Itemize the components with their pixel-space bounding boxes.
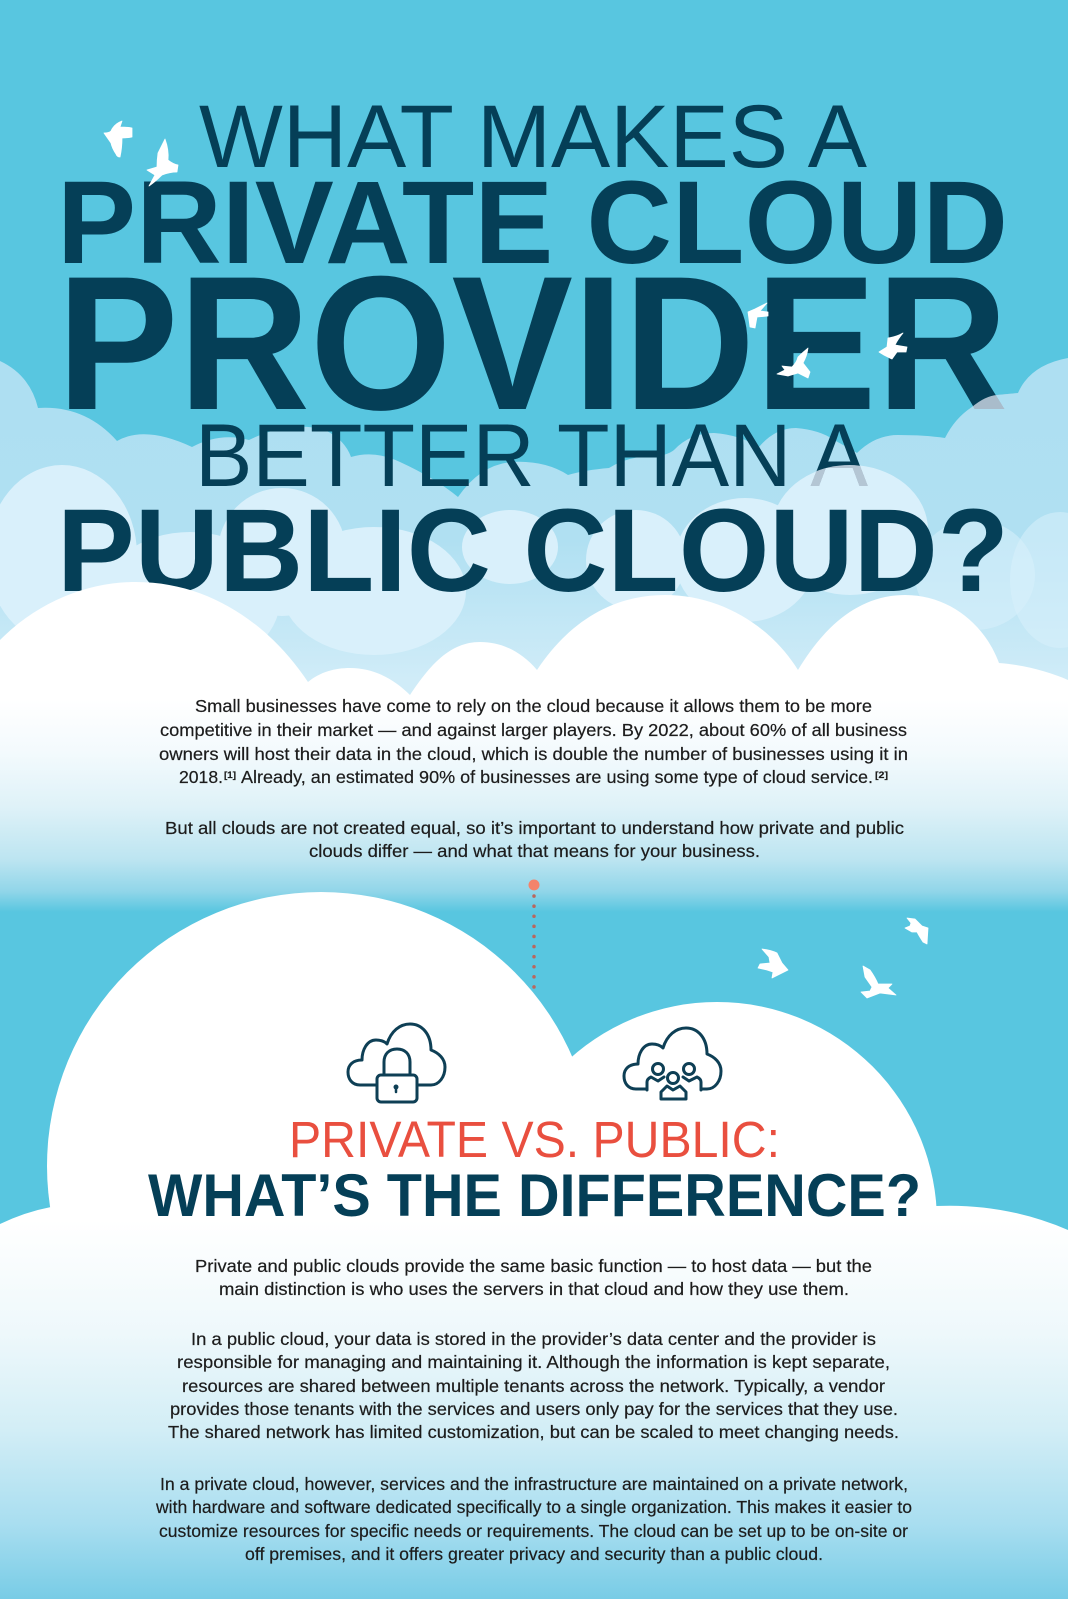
section heading <box>148 1111 921 1229</box>
difference body text: responsible for managing and maintaining it. Although the information is kept separate, <box>177 1352 890 1372</box>
lower big cloud <box>0 892 1068 1599</box>
main title: PROVIDER <box>57 237 1008 450</box>
birds over PROVIDER <box>748 303 907 378</box>
difference body text: with hardware and software dedicated specifically to a single organization. This makes it easier to <box>155 1497 912 1517</box>
icon: private cloud with lock <box>348 1024 445 1102</box>
intro text: competitive in their market — and against larger players. By 2022, about 60% of all business <box>160 720 907 740</box>
intro text <box>159 696 908 861</box>
intro text: Small businesses have come to rely on the cloud because it allows them to be more <box>195 696 872 716</box>
dotted connector <box>528 880 540 1000</box>
difference body text: In a private cloud, however, services and the infrastructure are maintained on a private network, <box>160 1474 908 1494</box>
section heading: WHAT’S THE DIFFERENCE? <box>148 1162 921 1229</box>
difference body text: resources are shared between multiple tenants across the network. Typically, a vendor <box>182 1376 885 1396</box>
back cloud layer <box>0 358 1068 720</box>
section heading: PRIVATE VS. PUBLIC: <box>289 1111 780 1168</box>
difference body text: provides those tenants with the services and users only pay for the services that they use. <box>170 1399 898 1419</box>
difference body text: The shared network has limited customization, but can be scaled to meet changing needs. <box>168 1422 899 1442</box>
front white cloud with intro text background <box>0 582 1068 912</box>
main title <box>57 86 1009 617</box>
difference body text: In a public cloud, your data is stored in the provider’s data center and the provider is <box>191 1329 876 1349</box>
intro text: 2018. <box>179 767 223 787</box>
cloud overlap on title letter A <box>810 465 882 490</box>
intro text: clouds differ — and what that means for your business. <box>309 841 760 861</box>
difference body text: Private and public clouds provide the same basic function — to host data — but the <box>195 1256 872 1276</box>
difference body text <box>155 1256 912 1564</box>
main title: PRIVATE CLOUD <box>57 157 1008 289</box>
middle cloud layer <box>0 465 1068 668</box>
intro text: Already, an estimated 90% of businesses are using some type of cloud service. <box>241 767 873 787</box>
main title: WHAT MAKES A <box>199 86 868 186</box>
intro text: [1] <box>224 770 236 780</box>
birds right of connector <box>758 918 928 998</box>
main title: PUBLIC CLOUD? <box>57 485 1009 617</box>
intro text: But all clouds are not created equal, so it’s important to understand how private and public <box>165 818 904 838</box>
difference body text: off premises, and it offers greater privacy and security than a public cloud. <box>245 1544 823 1564</box>
difference body text: main distinction is who uses the servers in that cloud and how they use them. <box>219 1279 849 1299</box>
difference body text: customize resources for specific needs or requirements. The cloud can be set up to be on-site or <box>159 1521 908 1541</box>
cloud overlap on title letter R <box>962 393 1018 415</box>
birds near title left <box>104 121 178 186</box>
intro text: owners will host their data in the cloud, which is double the number of businesses using it in <box>159 744 908 764</box>
icon: public cloud with people <box>624 1028 721 1099</box>
intro text: [2] <box>875 770 888 780</box>
main title: BETTER THAN A <box>195 405 869 505</box>
